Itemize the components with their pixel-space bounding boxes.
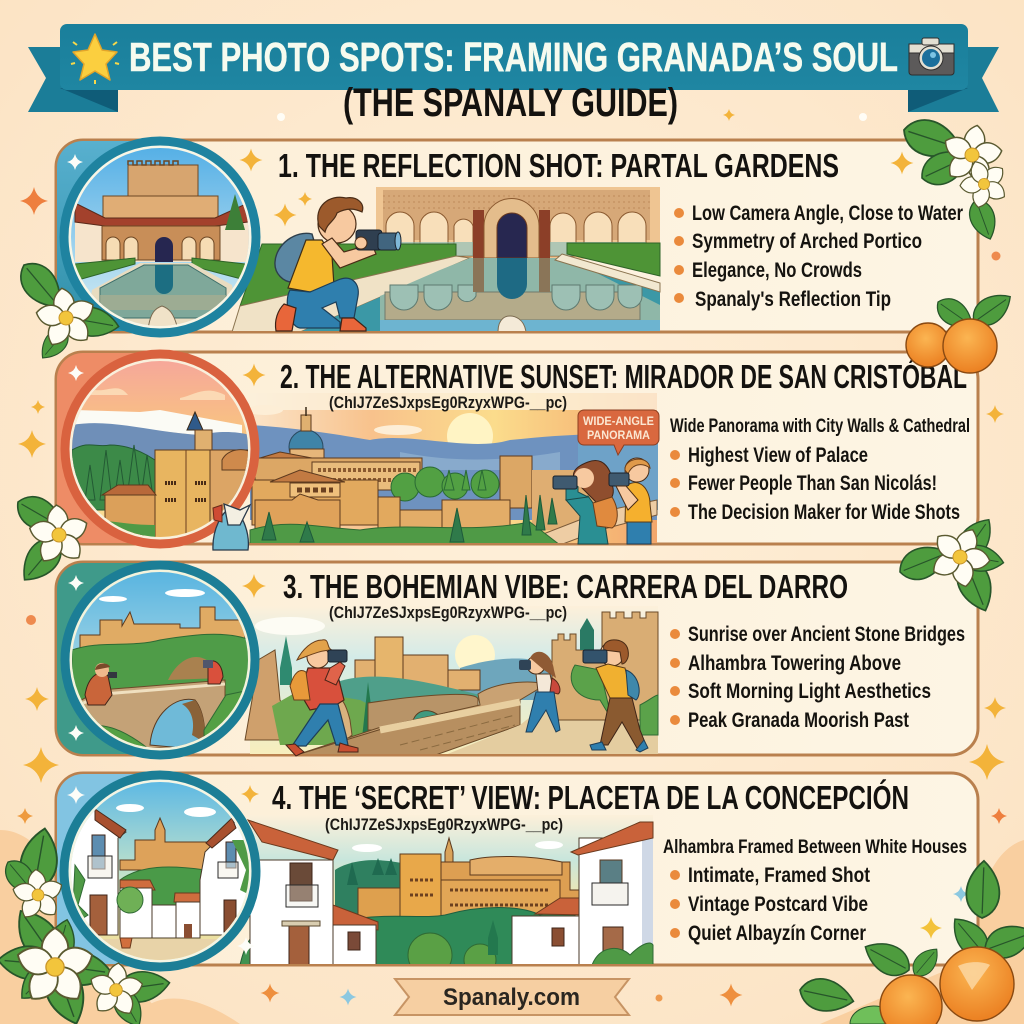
icon: flowers top right — [899, 114, 1019, 243]
bullet list — [674, 202, 963, 311]
bullet list: Elegance, No Crowds — [692, 259, 862, 282]
icon: flower left of panel one — [12, 255, 121, 365]
speech bubble: wide-angle panorama — [578, 410, 659, 455]
panel: reflection shot — [56, 140, 978, 333]
panel frame — [56, 773, 978, 965]
icon: oranges bottom right — [797, 860, 1024, 1024]
icon: flower left of panel two — [10, 489, 93, 589]
illustration: photographer kneeling — [275, 197, 401, 331]
bullet list: Spanaly's Reflection Tip — [695, 288, 891, 311]
right ribbon tail — [908, 47, 999, 112]
panel: alternative sunset — [56, 352, 978, 550]
text block — [663, 836, 967, 945]
colour strip — [57, 774, 134, 964]
speech bubble: wide-angle panorama: PANORAMA — [587, 430, 650, 442]
panel: bohemian vibe — [56, 562, 978, 757]
mascot penguin — [213, 504, 250, 550]
background blobs — [0, 830, 1024, 1024]
bullet list: Peak Granada Moorish Past — [688, 709, 909, 732]
place id: (ChIJ7ZeSJxpsEg0RzyxWPG-__pc) — [325, 815, 563, 834]
speech bubble: wide-angle panorama: WIDE-ANGLE — [583, 416, 654, 428]
subtitle: (THE SPANALY GUIDE) — [343, 81, 678, 125]
text block: Quiet Albayzín Corner — [688, 922, 866, 945]
panel frame — [56, 140, 978, 332]
illustration: two photographers — [553, 458, 652, 544]
photo circle — [64, 141, 256, 333]
footer ribbon: Spanaly.com — [443, 984, 580, 1011]
panel frame — [56, 562, 978, 755]
text block: Intimate, Framed Shot — [688, 864, 870, 887]
icon: camera — [909, 38, 954, 75]
text block: Fewer People Than San Nicolás! — [688, 472, 937, 495]
icon: flower right of panel two — [894, 512, 1006, 617]
banner body — [60, 24, 968, 90]
bullet list: Symmetry of Arched Portico — [692, 230, 922, 253]
text block — [670, 415, 970, 524]
photo circle — [65, 354, 255, 544]
panel: secret view — [56, 773, 978, 979]
bullet list: Alhambra Towering Above — [688, 652, 901, 675]
left ribbon tail — [28, 47, 118, 112]
colour strip — [57, 353, 134, 543]
title banner — [28, 24, 999, 112]
icon: star — [71, 34, 119, 84]
panel heading: 1. THE REFLECTION SHOT: PARTAL GARDENS — [278, 147, 839, 184]
icon: oranges on panel one — [906, 286, 1018, 373]
illustration: three walkers — [286, 640, 648, 756]
colour strip — [57, 563, 138, 754]
panel frame — [56, 352, 978, 544]
illustration: white houses and palace — [240, 819, 654, 964]
text block: Vintage Postcard Vibe — [688, 893, 868, 916]
colour strip — [57, 141, 130, 331]
footer ribbon — [395, 979, 629, 1015]
illustration: panorama — [247, 393, 658, 545]
illustration: bridges and walls — [245, 606, 658, 757]
icon: flowers bottom left — [0, 825, 172, 1024]
place id: (ChIJ7ZeSJxpsEg0RzyxWPG-__pc) — [329, 393, 567, 412]
place id: (ChIJ7ZeSJxpsEg0RzyxWPG-__pc) — [329, 603, 567, 622]
photo circle — [65, 565, 255, 755]
bullet list: Soft Morning Light Aesthetics — [688, 680, 931, 703]
illustration: courtyard and pool — [232, 187, 660, 332]
photo circle — [64, 775, 256, 967]
text block: Highest View of Palace — [688, 444, 868, 467]
bullet list — [670, 623, 965, 732]
